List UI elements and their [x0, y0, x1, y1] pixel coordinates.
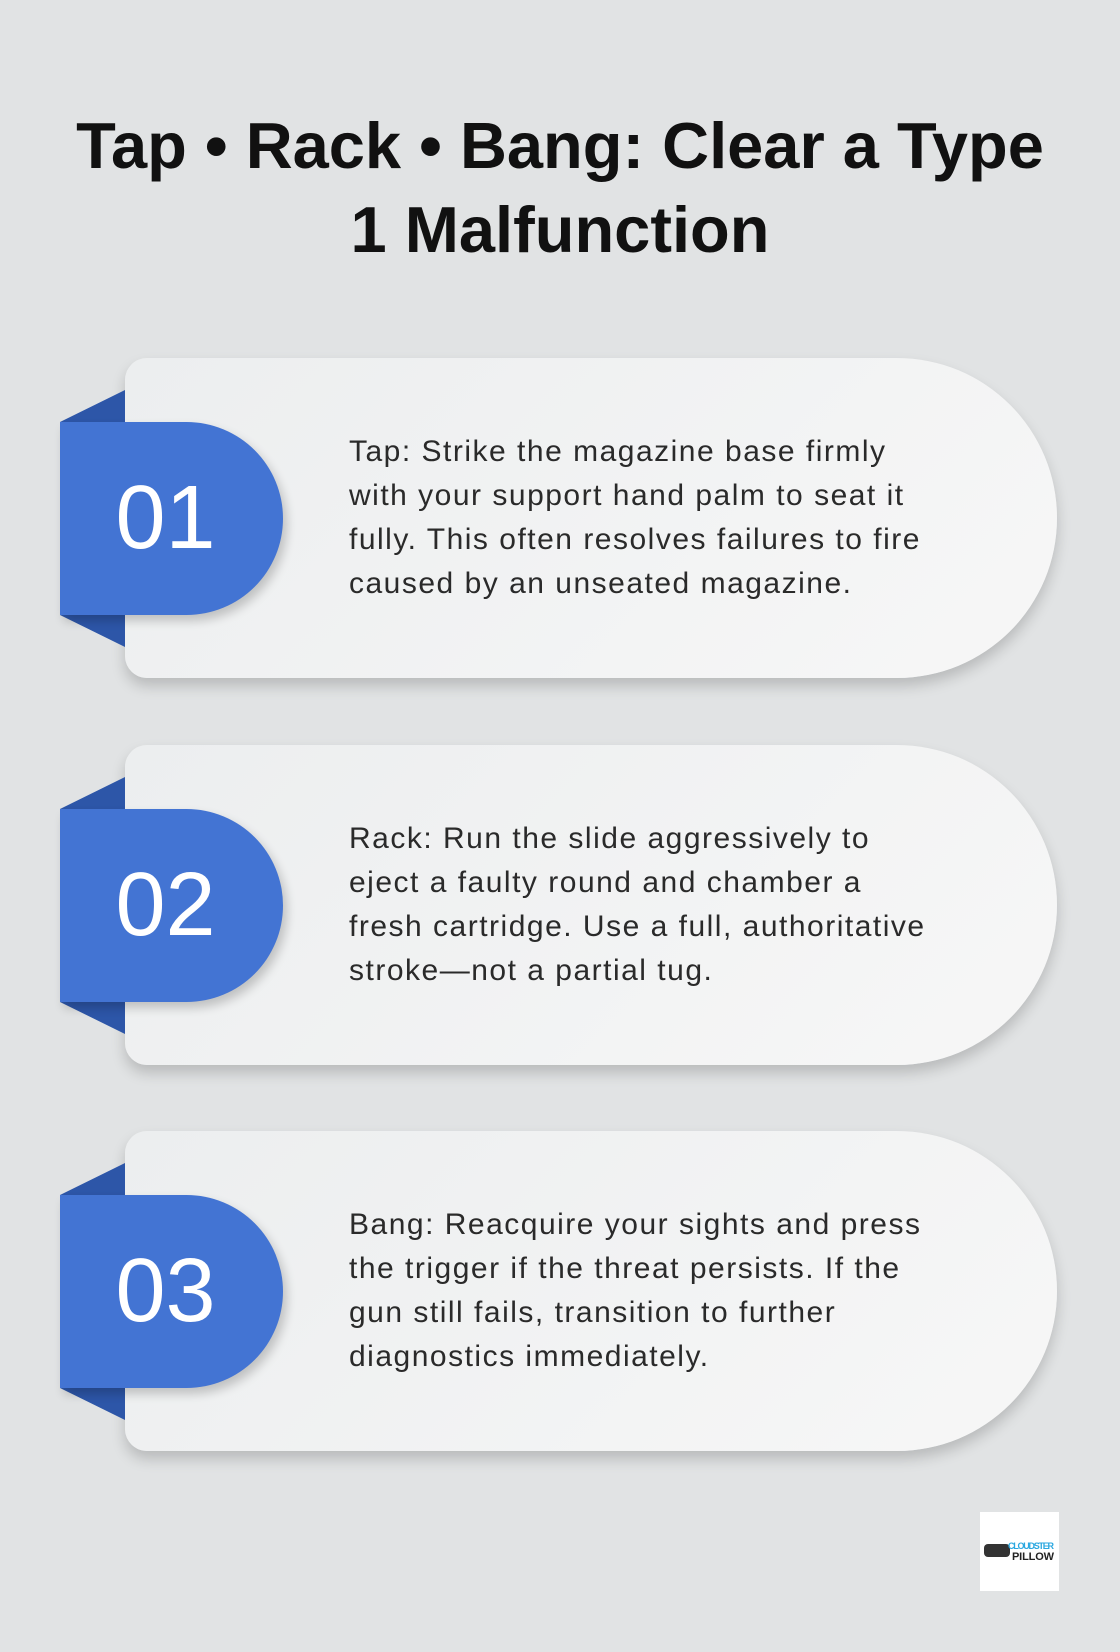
text 1: caused by an unseated magazine.: [349, 567, 852, 600]
title: [76, 109, 1044, 266]
step 2: [60, 745, 1062, 1079]
title: Tap • Rack • Bang: Clear a Type: [76, 109, 1044, 182]
text 1: [349, 435, 921, 600]
fold top: [60, 777, 125, 809]
number badge 02: [60, 809, 283, 1002]
text 2: fresh cartridge. Use a full, authoritative: [349, 910, 926, 943]
text 3: diagnostics immediately.: [349, 1340, 710, 1373]
card 2: [125, 745, 1057, 1065]
number badge 01: [60, 422, 283, 615]
text 1: with your support hand palm to seat it: [349, 479, 905, 512]
logo: CLOUDSTER: [1008, 1541, 1054, 1551]
fold bottom: [60, 615, 125, 647]
step 1: [60, 358, 1062, 692]
text 2: eject a faulty round and chamber a: [349, 866, 862, 899]
text 2: stroke—not a partial tug.: [349, 954, 713, 987]
fold top: [60, 390, 125, 422]
logo: PILLOW: [1012, 1551, 1055, 1563]
number badge 02: 02: [115, 855, 216, 955]
text 3: Bang: Reacquire your sights and press: [349, 1208, 921, 1241]
step 3: [60, 1131, 1062, 1465]
text 2: [349, 822, 926, 987]
number badge 03: 03: [115, 1241, 216, 1341]
text 3: gun still fails, transition to further: [349, 1296, 836, 1329]
title: 1 Malfunction: [351, 193, 769, 266]
text 1: Tap: Strike the magazine base firmly: [349, 435, 887, 468]
text 1: fully. This often resolves failures to fire: [349, 523, 921, 556]
fold bottom: [60, 1002, 125, 1034]
card 1: [125, 358, 1057, 678]
text 3: the trigger if the threat persists. If the: [349, 1252, 901, 1285]
text 2: Rack: Run the slide aggressively to: [349, 822, 870, 855]
text 3: [349, 1208, 921, 1373]
fold bottom: [60, 1388, 125, 1420]
fold top: [60, 1163, 125, 1195]
card 3: [125, 1131, 1057, 1451]
number badge 03: [60, 1195, 283, 1388]
logo: [980, 1512, 1059, 1591]
number badge 01: 01: [115, 468, 216, 568]
